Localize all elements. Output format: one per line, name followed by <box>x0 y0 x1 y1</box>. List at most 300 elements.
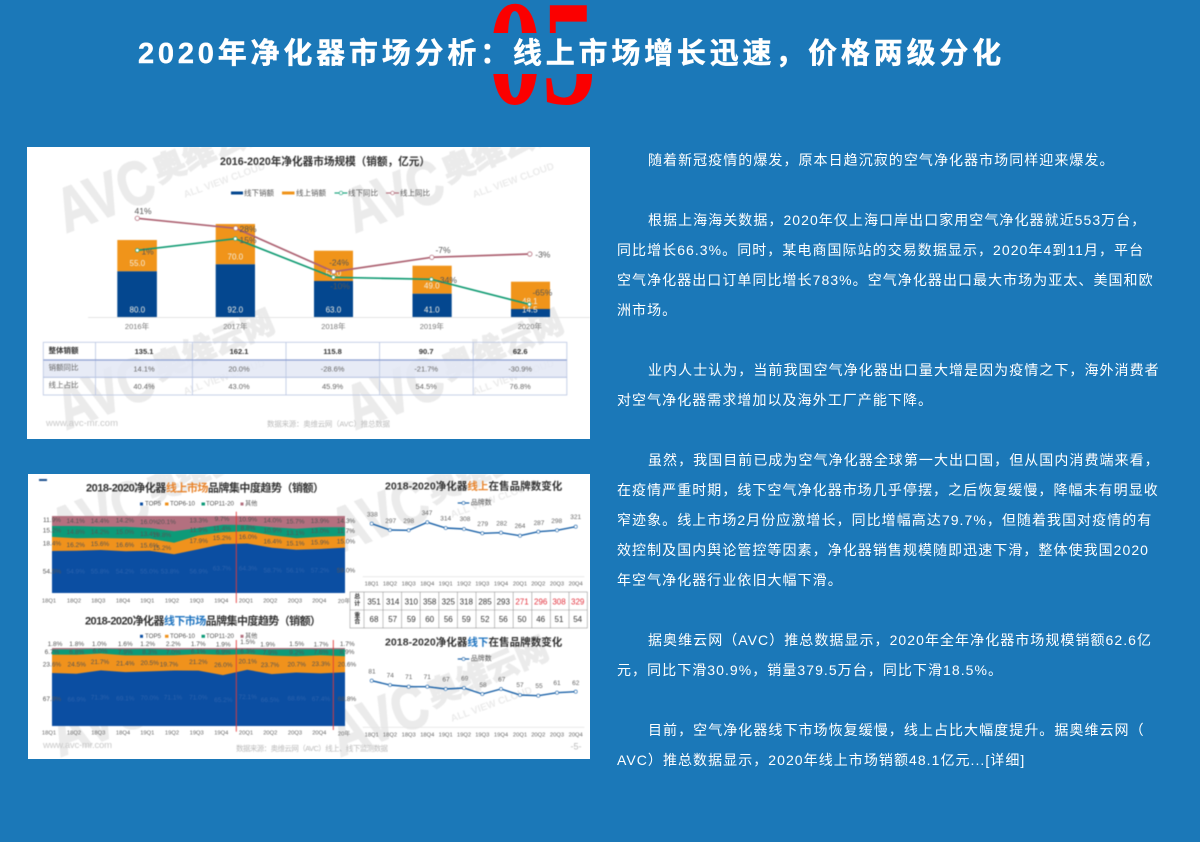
area labels: offline: 67.9% <box>43 696 61 703</box>
watermarks: ALL VIEW CLOUD <box>471 358 556 398</box>
article text: 虽然，我国目前已成为空气净化器全球第一大出口国，但从国内消费端来看， <box>648 452 1160 468</box>
panel: market size chart <box>27 147 590 439</box>
area labels: online: 54.5% <box>43 568 61 576</box>
area labels: offline: 1.5% <box>289 641 304 648</box>
x axis: offline: 19Q4 <box>214 730 229 736</box>
area labels: online: 14.3% <box>337 518 355 525</box>
data table: 115.8 <box>323 347 342 356</box>
brand count table: 60 <box>425 615 435 624</box>
area labels: offline: 71.3% <box>91 694 109 702</box>
data table: -30.9% <box>508 364 532 374</box>
area labels: online: 54.9% <box>66 568 85 576</box>
line labels: -3% <box>535 249 551 259</box>
line labels: -24% <box>329 257 349 267</box>
line chart: online brand count: 298 <box>551 518 563 525</box>
line labels: 41% <box>134 206 152 216</box>
brand count table: 308 <box>552 598 566 606</box>
line chart: online brand count <box>363 510 584 587</box>
line chart: online brand count: 19Q4 <box>494 581 509 587</box>
article text: 空气净化器出口订单同比增长783%。空气净化器出口最大市场为亚太、美国和欧 <box>617 272 1154 288</box>
line labels: -10% <box>330 281 350 291</box>
title: offline concentration: 2018-2020净化器线下市场品牌集中度趋势（销额） <box>85 614 321 628</box>
source line <box>45 418 390 429</box>
area labels: online: 15.9% <box>311 540 329 546</box>
line chart: offline brand count: 71 <box>424 674 431 681</box>
x axis years: 2016年 <box>125 321 150 331</box>
area labels: online: 15.0% <box>116 529 134 536</box>
area labels: online: 63.7% <box>213 566 231 572</box>
area labels: offline: 7.9% <box>118 649 133 656</box>
area labels: offline: 6.0% <box>93 648 108 655</box>
x axis: offline: 19Q1 <box>140 730 154 736</box>
x axis years: 2018年 <box>321 321 346 331</box>
title: offline brand count: 2018-2020净化器线下在售品牌数变化 <box>385 635 563 648</box>
line chart: online brand count: 18Q4 <box>420 581 435 587</box>
article text <box>617 152 1160 768</box>
area labels: online: 13.4% <box>140 531 159 538</box>
area labels: online: 17.9% <box>189 538 208 545</box>
brand count table: 计 <box>354 600 360 608</box>
area labels: offline: 6.9% <box>216 649 231 656</box>
area labels: online: 16.0% <box>140 519 159 526</box>
watermarks: 奥维云网 <box>437 303 569 386</box>
x axis: online: 18Q2 <box>67 598 81 604</box>
chart title: 2016-2020年净化器市场规模（销额，亿元） <box>220 154 430 168</box>
watermarks: ALL VIEW CLOUD <box>182 358 267 398</box>
area labels: online: 58.7% <box>263 568 282 574</box>
data table: 销额同比 <box>48 362 79 372</box>
data table: 45.9% <box>322 382 344 391</box>
brand count table: 358 <box>423 598 437 606</box>
watermarks <box>46 106 569 443</box>
data table: -21.7% <box>414 364 438 374</box>
line chart: offline brand count: 74 <box>387 672 394 680</box>
area labels: online: 15.7% <box>286 518 305 526</box>
bar value labels <box>130 252 538 314</box>
area labels: offline: 23.3% <box>312 661 330 668</box>
line chart: offline brand count: 18Q1 <box>365 733 379 739</box>
x axis: offline: 18Q3 <box>91 730 105 736</box>
source line <box>42 740 582 753</box>
x axis: online: 18Q4 <box>116 598 131 604</box>
watermarks: 奥维云网 <box>422 630 554 713</box>
brand count table: 271 <box>515 598 529 606</box>
line: offline yoy <box>136 237 531 306</box>
area labels: offline: 1.9% <box>260 641 275 648</box>
x axis: offline: 20年 <box>338 730 350 738</box>
brand count table: 51 <box>555 615 564 624</box>
area labels: online: 16.6% <box>116 542 134 549</box>
brand count table: 50 <box>518 615 527 624</box>
data table: 135.1 <box>135 347 153 356</box>
line chart: online brand count: 19Q2 <box>457 581 471 587</box>
brand count table: 310 <box>405 598 419 606</box>
legend: offline concentration: TOP5 <box>145 633 162 640</box>
brand count table: 46 <box>536 615 546 624</box>
article text: 随着新冠疫情的爆发，原本日趋沉寂的空气净化器市场同样迎来爆发。 <box>648 152 1115 168</box>
area labels: online: 16.4% <box>263 538 282 546</box>
data table: 线上占比 <box>48 380 79 390</box>
data table: 整体销额 <box>48 345 79 355</box>
area labels: online: 15.6% <box>91 541 109 548</box>
area labels: offline: 8.9% <box>340 649 355 656</box>
area labels: online: 15.0% <box>337 538 355 546</box>
brand count table: 68 <box>370 615 379 624</box>
line chart: online brand count: 19Q1 <box>439 581 453 587</box>
line chart: online brand count: 20Q4 <box>569 581 584 587</box>
brand count table: 293 <box>497 598 511 606</box>
line chart: offline brand count: 81 <box>368 668 376 676</box>
bar value labels: 55.0 <box>130 259 146 268</box>
area labels: offline: 9.2% <box>289 649 304 656</box>
area labels: online: 13.0% <box>311 528 329 535</box>
line chart: offline brand count: 62 <box>572 680 580 687</box>
line chart: offline brand count: 71 <box>405 674 413 681</box>
data table: 54.5% <box>416 382 437 391</box>
line chart: offline brand count: 20Q2 <box>531 733 545 739</box>
bar value labels: 92.0 <box>228 306 244 314</box>
x axis: online: 20年 <box>338 597 350 605</box>
line labels: 28% <box>239 224 257 234</box>
line labels: -34% <box>437 275 457 285</box>
line chart: online brand count: 347 <box>422 510 433 517</box>
legend: online concentration: TOP6-10 <box>170 500 196 508</box>
area labels: offline: 24.5% <box>67 662 86 668</box>
x axis: online: 19Q1 <box>140 598 154 604</box>
line chart: online brand count: 279 <box>477 521 489 528</box>
line chart: offline brand count: 19Q2 <box>457 733 471 739</box>
x axis: online: 18Q1 <box>42 598 56 604</box>
bar value labels: 70.0 <box>228 252 244 262</box>
legend: offline concentration: TOP11-20 <box>206 633 235 640</box>
area labels: offline: 71.0% <box>189 694 208 702</box>
legend: offline concentration: TOP6-10 <box>170 633 196 640</box>
line chart: offline brand count: 20Q4 <box>569 733 584 739</box>
watermarks: ALL VIEW CLOUD <box>449 481 534 521</box>
watermarks: ALL VIEW CLOUD <box>182 161 267 201</box>
line chart: online brand count: 298 <box>403 518 415 525</box>
line chart: offline brand count: 19Q1 <box>439 733 453 739</box>
area labels: online: 11.4% <box>213 526 231 532</box>
area labels: online: 15.2% <box>153 545 171 552</box>
area labels: offline: 72.1% <box>238 694 257 701</box>
brand count table: 325 <box>442 598 456 606</box>
x axis years: 2019年 <box>420 321 444 331</box>
title: online concentration: 2018-2020净化器线上市场品牌集中度趋势（销额） <box>86 480 324 494</box>
line chart: online brand count: 338 <box>367 512 378 518</box>
legend: online concentration: 其他 <box>245 500 257 508</box>
line chart: online brand count: 314 <box>440 516 452 522</box>
line chart: offline brand count: 20Q3 <box>550 733 564 739</box>
area labels: offline: 20.6% <box>338 662 356 668</box>
line chart: offline brand count: 57 <box>516 682 524 689</box>
legend: 线下销额 <box>244 188 274 198</box>
x axis: online: 20Q4 <box>312 598 327 604</box>
brand count table: 合 <box>354 618 360 626</box>
line chart: offline brand count: 18Q3 <box>402 733 416 739</box>
area labels: online: 16.0% <box>239 534 257 541</box>
area labels: online: 10.9% <box>239 516 257 524</box>
area labels: online: 53.8% <box>161 568 179 576</box>
line chart: offline brand count: 61 <box>553 680 561 687</box>
line labels: -65% <box>532 288 553 298</box>
area labels: offline: 1.5% <box>240 639 255 646</box>
area labels: offline: 1.0% <box>92 641 107 648</box>
line chart: offline brand count: 67 <box>498 676 506 684</box>
area labels: online: 15.1% <box>286 540 305 548</box>
x axis: online: 19Q2 <box>165 598 179 604</box>
area labels: online <box>43 516 355 576</box>
article text: 对空气净化器需求增加以及海外工厂产能下降。 <box>617 392 933 408</box>
line labels: 1% <box>141 246 154 256</box>
source line: 数据来源：奥维云网（AVC）推总数据 <box>267 418 390 428</box>
title: online brand count: 2018-2020净化器线上在售品牌数变化 <box>385 480 563 493</box>
area labels: offline: 23.7% <box>261 662 279 669</box>
source line: 数据来源：奥维云网（AVC）线上、线下监测数据 <box>236 743 388 753</box>
brand count table: 314 <box>386 598 400 606</box>
line chart: offline brand count: 55 <box>535 683 543 690</box>
area labels: offline: 68.6% <box>287 696 306 702</box>
bar value labels: 48.1 <box>522 297 538 306</box>
area labels: online: 59.0% <box>337 568 355 574</box>
area labels: offline: 1.8% <box>48 641 63 648</box>
source line: www.avc-mr.com <box>45 418 118 429</box>
x axis: online: 18Q3 <box>91 598 105 604</box>
area labels: online: 19.8% <box>153 532 171 539</box>
area labels: offline: 6.3% <box>240 648 255 656</box>
bar value labels: 80.0 <box>130 306 146 314</box>
article text: 根据上海海关数据，2020年仅上海口岸出口家用空气净化器就近553万台， <box>648 212 1146 228</box>
brand count table <box>350 592 587 628</box>
x axis: online: 19Q3 <box>190 598 204 604</box>
area labels: online: 15.2% <box>213 535 231 542</box>
x axis: online: 19Q4 <box>214 598 229 604</box>
area labels: offline: 1.8% <box>69 641 84 648</box>
legend: online brand count <box>458 498 492 506</box>
area labels: offline: 7.9% <box>263 649 278 656</box>
area labels: online: 14.8% <box>66 529 85 536</box>
legend: online concentration: TOP5 <box>145 500 162 508</box>
article text: 洲市场。 <box>617 302 677 318</box>
area labels: offline: 1.7% <box>191 641 206 648</box>
x axis years: 2020年 <box>518 321 542 331</box>
brand count table: 329 <box>571 598 585 606</box>
area labels: offline: 1.7% <box>340 641 355 648</box>
brand count table: 351 <box>367 598 381 606</box>
line chart: online brand count: 264 <box>515 523 526 530</box>
area labels: offline: 1.7% <box>314 641 329 648</box>
brand count table: 56 <box>499 615 508 624</box>
line labels <box>134 206 553 298</box>
legend: online concentration <box>140 500 257 508</box>
area labels: offline: 19.7% <box>160 662 178 668</box>
area labels: offline: 1.2% <box>140 641 155 648</box>
area labels: offline: 71.1% <box>164 694 182 702</box>
line chart: online brand count: 287 <box>534 520 545 527</box>
legend: online concentration: TOP11-20 <box>206 500 235 508</box>
x axis: online: 20Q1 <box>239 598 253 604</box>
stacked bars <box>88 224 590 318</box>
data table: 43.0% <box>228 382 250 391</box>
x axis: offline: 20Q4 <box>312 730 327 736</box>
line chart: offline brand count <box>363 668 584 739</box>
x axis: offline: 19Q2 <box>165 730 179 736</box>
area labels: offline: 6.8% <box>69 649 84 656</box>
line chart: online brand count: 282 <box>496 520 508 528</box>
area labels: offline <box>43 639 356 704</box>
brand count table: 59 <box>462 615 471 624</box>
x axis years <box>125 321 542 331</box>
stacked area: online <box>52 516 345 593</box>
x axis: offline: 18Q4 <box>116 730 131 736</box>
area labels: offline: 20.1% <box>238 658 257 666</box>
area labels: online: 14.2% <box>116 518 134 524</box>
area labels: offline: 21.2% <box>189 659 208 666</box>
bar value labels: 63.0 <box>326 306 342 314</box>
source line: -5- <box>570 742 582 752</box>
data table: 40.4% <box>133 382 155 391</box>
brand count table: 59 <box>407 615 416 624</box>
area labels: offline: 6.1% <box>191 648 206 656</box>
legend <box>231 188 430 198</box>
x axis: offline: 19Q3 <box>190 730 204 736</box>
article text: 元，同比下滑30.9%，销量379.5万台，同比下滑18.5%。 <box>617 662 1003 678</box>
area labels: online: 13.1% <box>286 530 305 537</box>
area labels: offline: 1.6% <box>118 641 133 648</box>
x axis: offline: 18Q2 <box>67 730 81 736</box>
x axis: online <box>42 597 350 605</box>
x axis: offline: 18Q1 <box>42 730 56 736</box>
source line: www.avc-mr.com <box>42 740 112 751</box>
area labels: online: 55.8% <box>91 568 109 576</box>
legend: offline brand count <box>458 654 492 662</box>
area labels: online: 55.0% <box>140 568 159 576</box>
line labels: -7% <box>435 245 451 255</box>
area labels: offline: 68.8% <box>338 696 356 703</box>
line chart: offline brand count: 20Q1 <box>513 733 527 739</box>
area labels: online: 8.8% <box>241 525 256 532</box>
data table <box>43 342 567 395</box>
article text: 效控制及国内舆论管控等因素，净化器销售规模随即迅速下滑，整体使我国2020 <box>617 542 1149 558</box>
line chart: online brand count: 321 <box>570 514 582 521</box>
bar value labels: 52.0 <box>326 269 342 278</box>
area labels: offline: 20.7% <box>287 662 306 668</box>
line labels: 15% <box>239 235 257 245</box>
article text: 年空气净化器行业依旧大幅下滑。 <box>617 572 843 588</box>
brand count table: 318 <box>460 598 474 606</box>
stacked area: offline <box>52 648 345 726</box>
data table: 162.1 <box>230 347 248 356</box>
data table: 14.1% <box>133 364 155 374</box>
data table: 76.8% <box>510 382 531 391</box>
line chart: online brand count: 20Q1 <box>513 581 527 587</box>
article text: 窄迹象。线上市场2月份应激增长，同比增幅高达79.7%，但随着我国对疫情的有 <box>617 512 1152 528</box>
area labels: online: 15.2% <box>43 528 61 534</box>
article text: 业内人士认为，当前我国空气净化器出口量大增是因为疫情之下，海外消费者 <box>648 362 1160 378</box>
x axis years: 2017年 <box>223 321 248 331</box>
legend: 线上销额 <box>296 188 326 198</box>
bar value labels: 14.5 <box>522 306 538 314</box>
area labels: online: 57.2% <box>311 568 329 574</box>
article text: AVC）推总数据显示，2020年线上市场销额48.1亿元...[详细] <box>617 752 1025 768</box>
brand count table: 重 <box>354 612 360 620</box>
legend: online brand count: 品牌数 <box>471 498 492 506</box>
article text: 在疫情严重时期，线下空气净化器市场几乎停摆，之后恢复缓慢，降幅未有明显收 <box>617 482 1159 498</box>
area labels: online: 10.9% <box>263 528 282 534</box>
line chart: online brand count: 297 <box>385 518 397 525</box>
line chart: online brand count: 20Q3 <box>550 581 564 587</box>
area labels: offline: 7.6% <box>314 649 329 656</box>
area labels: offline: 1.9% <box>216 641 231 648</box>
area labels: offline: 66.9% <box>67 696 86 704</box>
article text: 据奥维云网（AVC）推总数据显示，2020年全年净化器市场规模销额62.6亿 <box>648 632 1152 648</box>
area labels: online: 13.9% <box>311 518 329 525</box>
area labels: online: 20.1% <box>157 519 176 526</box>
area labels: offline: 20.5% <box>140 660 159 667</box>
x axis: offline: 20Q2 <box>263 730 277 736</box>
data table: -28.6% <box>321 364 345 374</box>
area labels: offline: 65.2% <box>214 697 233 704</box>
legend: 线上同比 <box>400 188 430 198</box>
brand count table: 56 <box>444 615 453 624</box>
area labels: offline: 23.6% <box>43 662 61 668</box>
area labels: offline: 6.7% <box>45 649 60 656</box>
legend: offline concentration <box>140 632 257 640</box>
line chart: online brand count: 18Q2 <box>383 581 397 587</box>
area labels: offline: 7.0% <box>166 649 181 656</box>
corner mark <box>39 479 47 481</box>
area labels: offline: 21.7% <box>91 659 109 666</box>
brand count table: 54 <box>573 615 583 624</box>
area labels: offline: 70.0% <box>140 695 159 702</box>
line chart: online brand count: 18Q1 <box>365 581 379 587</box>
line chart: online brand count: 18Q3 <box>402 581 416 587</box>
brand count table: 52 <box>481 615 490 624</box>
data table: 90.7 <box>419 347 434 356</box>
brand count table: 285 <box>478 598 492 606</box>
area labels: online: 14.1% <box>66 518 85 525</box>
legend: offline brand count: 品牌数 <box>471 654 492 662</box>
area labels: online: 9.7% <box>215 516 230 523</box>
area labels: offline: 26.0% <box>214 662 233 669</box>
area labels: online: 13.3% <box>189 518 208 524</box>
watermarks: 奥维云网 <box>148 303 280 386</box>
area labels: online: 15.6% <box>140 542 159 550</box>
area labels: offline: 69.1% <box>116 696 135 702</box>
brand count table: 296 <box>534 598 548 606</box>
x axis: offline: 20Q3 <box>288 730 302 736</box>
x axis: offline: 20Q1 <box>239 730 253 736</box>
bar value labels: 49.0 <box>424 282 440 290</box>
area labels: offline: 66.5% <box>261 697 279 704</box>
area labels: online: 14.0% <box>263 518 282 524</box>
line chart: offline brand count: 18Q2 <box>383 733 397 739</box>
data table: 62.6 <box>513 347 528 356</box>
area labels: online: 14.4% <box>91 518 109 525</box>
line chart: offline brand count: 18Q4 <box>420 733 435 739</box>
area labels: online: 54.2% <box>116 568 134 576</box>
line chart: offline brand count: 67 <box>442 676 450 684</box>
brand count table: 总 <box>354 592 360 600</box>
x axis: online: 20Q3 <box>288 598 302 604</box>
article text: 同比增长66.3%。同时，某电商国际站的交易数据显示，2020年4到11月，平台 <box>617 242 1144 258</box>
watermarks: ALL VIEW CLOUD <box>449 685 534 725</box>
brand count table: 57 <box>388 615 398 624</box>
area labels: online: 18.4% <box>43 540 61 548</box>
x axis: offline <box>42 730 350 738</box>
area labels: online: 14.2% <box>91 529 109 536</box>
line chart: offline brand count: 19Q3 <box>475 733 489 739</box>
